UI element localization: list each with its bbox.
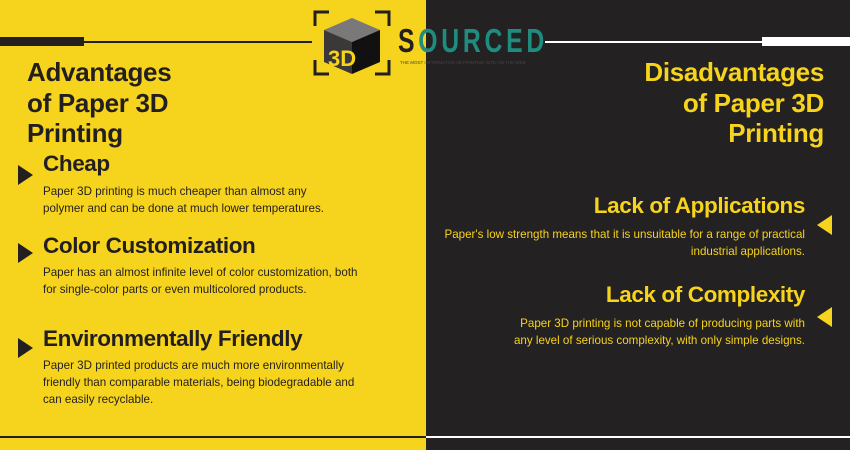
title: advantages: Advantages — [27, 57, 171, 87]
title: disadvantages — [644, 57, 824, 148]
item: complexity: any level of serious complexity, with only simple designs. — [514, 334, 805, 347]
title: advantages — [27, 57, 171, 148]
item: cheap: Cheap — [43, 151, 110, 176]
dark right panel — [426, 0, 850, 450]
logo: 3D — [328, 46, 356, 71]
item: color — [18, 233, 358, 296]
title: disadvantages: Printing — [728, 118, 824, 148]
item: env: can easily recyclable. — [43, 393, 153, 406]
logo — [314, 10, 548, 76]
title: advantages: Printing — [27, 118, 123, 148]
item: env: friendly than comparable materials, being biodegradable and — [43, 376, 354, 389]
item: cheap — [18, 151, 324, 215]
item: applications: Lack of Applications — [594, 193, 805, 218]
item: env: Paper 3D printed products are much more environmentally — [43, 359, 344, 372]
item: complexity: Lack of Complexity — [606, 282, 805, 307]
title: disadvantages: Disadvantages — [644, 57, 824, 87]
item: applications — [444, 193, 832, 258]
item: env — [18, 326, 354, 406]
item: applications: industrial applications. — [691, 245, 805, 258]
item: applications: Paper's low strength means that it is unsuitable for a range of practical — [444, 228, 805, 241]
item: color: Paper has an almost infinite level of color customization, both — [43, 266, 358, 279]
item: color: for single-color parts or even multicolored products. — [43, 283, 307, 296]
item: env: Environmentally Friendly — [43, 326, 302, 351]
item: color: Color Customization — [43, 233, 255, 258]
logo: THE MOST INFORMATIVE 3D PRINTING SITE ON THE WEB — [400, 60, 526, 65]
item: cheap: polymer and can be done at much lower temperatures. — [43, 202, 324, 215]
item: complexity — [514, 282, 832, 347]
item: cheap: Paper 3D printing is much cheaper than almost any — [43, 185, 307, 198]
title: disadvantages: of Paper 3D — [683, 88, 824, 118]
title: advantages: of Paper 3D — [27, 88, 168, 118]
item: complexity: Paper 3D printing is not capable of producing parts with — [520, 317, 805, 330]
logo: SOURCED — [398, 22, 548, 59]
